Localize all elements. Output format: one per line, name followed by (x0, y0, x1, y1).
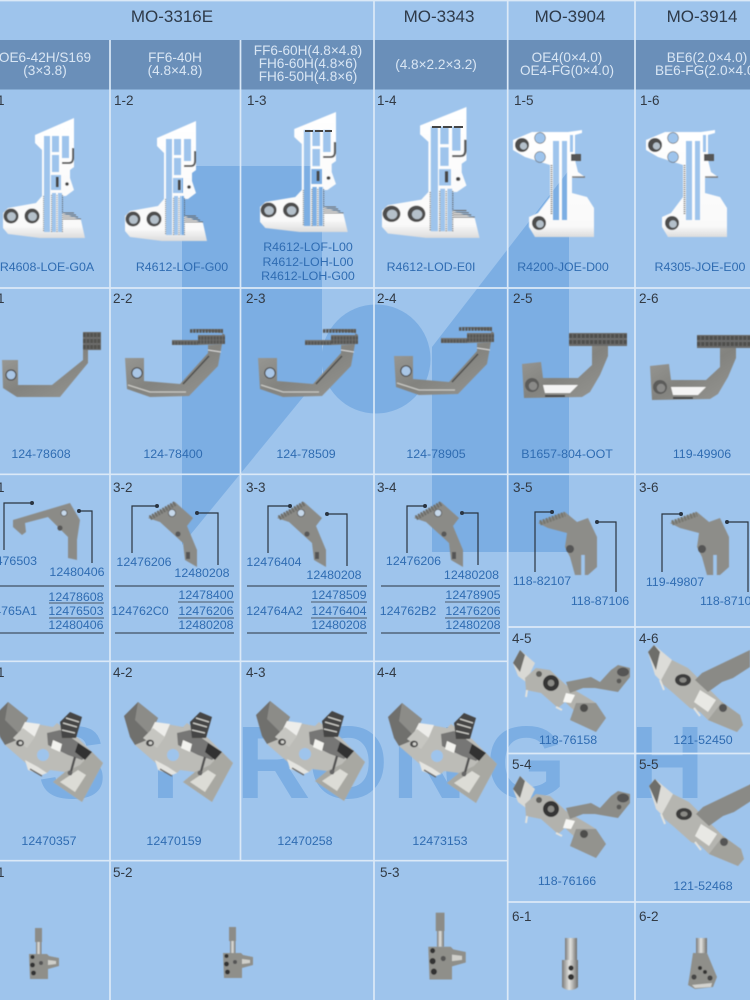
cell 1-1: R4608-LOE-G0A (0, 260, 95, 274)
cell 6-1: 6-1 (512, 909, 532, 924)
header band (0, 7, 750, 90)
cell 3-3: 124764A2 (246, 604, 303, 618)
cell 1-4 (377, 93, 480, 274)
cell 3-2: 12480208 (174, 566, 230, 580)
cell 4-1 (0, 665, 103, 848)
cell 6-2 (639, 909, 717, 989)
cell 3-4: 3-4 (377, 480, 397, 495)
cell 5-5: 121-52468 (673, 879, 733, 893)
cell 3-5: 118-82107 (513, 574, 571, 588)
cell 1-2 (114, 93, 228, 274)
cell 6-2: 6-2 (639, 909, 659, 924)
cell 3-4: 12476206 (445, 604, 501, 618)
spec: 4.8×2.2×3.2: (4.8×2.2×3.2) (395, 57, 477, 72)
cell 2-5: B1657-804-OOT (521, 447, 613, 461)
cell 1-6: R4305-JOE-E00 (655, 260, 746, 274)
cell 3-3 (246, 480, 367, 633)
cell 3-2: 12476206 (178, 604, 234, 618)
cell 1-6: 1-6 (640, 93, 660, 108)
cell 1-5: R4200-JOE-D00 (517, 260, 609, 274)
cell 3-6 (639, 480, 750, 608)
cell 2-4: 2-4 (377, 291, 397, 306)
cell 2-6: 2-6 (639, 291, 659, 306)
cell 3-4: 12478905 (445, 588, 501, 602)
spec: FF6-60H group: FH6-60H(4.8×6) (259, 56, 357, 71)
cell 1-5: 1-5 (514, 93, 534, 108)
cell 3-3: 3-3 (246, 480, 266, 495)
spec: FF6-40H: (4.8×4.8) (148, 63, 202, 78)
cell 5-5: 5-5 (639, 757, 659, 772)
cell 3-3: 12476404 (246, 555, 302, 569)
cell 4-4 (377, 665, 497, 848)
model name: MO-3343: MO-3343 (404, 7, 474, 26)
cell 1-6 (640, 93, 746, 274)
cell 1-3: 1-3 (247, 93, 267, 108)
cell 3-5 (513, 480, 629, 608)
cell 1-4: 1-4 (377, 93, 397, 108)
cell 4-3 (246, 665, 365, 848)
cell 4-5 (512, 631, 630, 747)
cell 3-5: 3-5 (513, 480, 533, 495)
cell 3-2: 124762C0 (111, 604, 169, 618)
cell 5-1 (0, 865, 59, 979)
spec: OE4: OE4(0×4.0) (532, 50, 602, 65)
cell 1-2: R4612-LOF-G00 (136, 260, 228, 274)
cell 3-5: 118-87106 (571, 594, 629, 608)
watermark text: STRONG H (38, 705, 704, 820)
cell 2-5: 2-5 (513, 291, 533, 306)
cell 5-3 (380, 865, 466, 979)
cell 5-4 (512, 757, 630, 888)
cell 3-6: 119-49807 (646, 575, 704, 589)
cell 4-5: 4-5 (512, 631, 532, 646)
cell 3-1: 12478608 (48, 590, 104, 604)
spec: FF6-60H group: FF6-60H(4.8×4.8) (254, 43, 362, 58)
row 2: feed dogs (0, 291, 750, 461)
spec: OE6-42H/S169: OE6-42H/S169 (0, 50, 91, 65)
cell 1-3: R4612-LOH-L00 (263, 255, 354, 269)
cell 1-3: R4612-LOH-G00 (261, 269, 355, 283)
cell 3-1: 12476503 (48, 604, 104, 618)
spec: FF6-60H group: FH6-50H(4.8×6) (259, 69, 357, 84)
cell 3-4: 124762B2 (380, 604, 436, 618)
cell 4-6 (639, 631, 750, 747)
cell 4-2 (113, 665, 233, 848)
cell 3-4: 12480208 (444, 568, 499, 582)
cell 2-6 (639, 291, 750, 461)
cell 3-4 (377, 480, 501, 633)
cell 3-1: 12480406 (48, 618, 104, 632)
cell 6-1 (512, 909, 578, 990)
cell 1-3 (247, 93, 355, 283)
cell 1-5 (513, 93, 609, 274)
cell 3-3: 12476404 (311, 604, 367, 618)
cell 5-2 (113, 865, 253, 978)
spec: OE6-42H/S169: (3×3.8) (23, 63, 67, 78)
cell 3-3: 12478509 (311, 588, 367, 602)
cell 2-4: 124-78905 (406, 447, 466, 461)
cell 3-1: 12480406 (49, 565, 105, 579)
row 1: needle plates (0, 93, 746, 283)
row 4: presser feet (0, 631, 750, 848)
cell 1-2: 1-2 (114, 93, 134, 108)
cell 5-2: 5-2 (113, 865, 133, 880)
row 3: feed dog assemblies (0, 480, 750, 633)
cell 4-2: 4-2 (113, 665, 133, 680)
spec: FF6-40H: FF6-40H (148, 50, 202, 65)
cell 2-3: 2-3 (246, 291, 266, 306)
cell 3-2: 12478400 (178, 588, 234, 602)
cell 3-6: 3-6 (639, 480, 659, 495)
model name: MO-3316E: MO-3316E (131, 7, 213, 26)
cell 3-1 (0, 480, 105, 633)
cell 3-2 (111, 480, 234, 633)
cell 3-2: 3-2 (113, 480, 133, 495)
spec: BE6: BE6(2.0×4.0) (667, 50, 747, 65)
cell 2-2: 2-2 (113, 291, 133, 306)
model name: MO-3914: MO-3914 (667, 7, 737, 26)
cell 1-3: R4612-LOF-L00 (263, 240, 353, 254)
cell 3-4: 12480208 (445, 618, 501, 632)
cell 3-3: 12480208 (311, 618, 367, 632)
cell 2-2 (113, 291, 225, 461)
cell 1-1 (0, 93, 95, 274)
cell 2-1 (0, 291, 101, 461)
cell 4-1: 12470357 (21, 834, 77, 848)
spec: OE4: OE4-FG(0×4.0) (520, 63, 614, 78)
cell 5-4: 118-76166 (538, 874, 596, 888)
cell 3-2: 12476206 (116, 555, 172, 569)
model name: MO-3904: MO-3904 (535, 7, 605, 26)
cell 4-4: 12473153 (412, 834, 468, 848)
cell 4-4: 4-4 (377, 665, 397, 680)
row 5: presser feet and holders (0, 757, 750, 979)
row 6: needle clamps (512, 909, 717, 990)
cell 5-5 (639, 757, 750, 893)
cell 3-2: 12480208 (178, 618, 234, 632)
cell 2-3: 124-78509 (276, 447, 336, 461)
cell 2-3 (246, 291, 358, 461)
cell 4-6: 121-52450 (673, 733, 733, 747)
cell 4-6: 4-6 (639, 631, 659, 646)
cell 4-3: 4-3 (246, 665, 266, 680)
cell 2-6: 119-49906 (673, 447, 731, 461)
cell 4-2: 12470159 (146, 834, 202, 848)
cell 1-4: R4612-LOD-E0I (387, 260, 475, 274)
cell 3-3: 12480208 (306, 568, 362, 582)
cell 4-3: 12470258 (277, 834, 333, 848)
cell 2-5 (513, 291, 627, 461)
cell 3-4: 12476206 (386, 554, 441, 568)
cell 5-4: 5-4 (512, 757, 532, 772)
cell 5-3: 5-3 (380, 865, 400, 880)
watermark logo (182, 166, 569, 552)
cell 2-2: 124-78400 (143, 447, 203, 461)
cell 4-5: 118-76158 (539, 733, 597, 747)
cell 2-4 (377, 291, 494, 461)
cell 2-1: 124-78608 (11, 447, 71, 461)
